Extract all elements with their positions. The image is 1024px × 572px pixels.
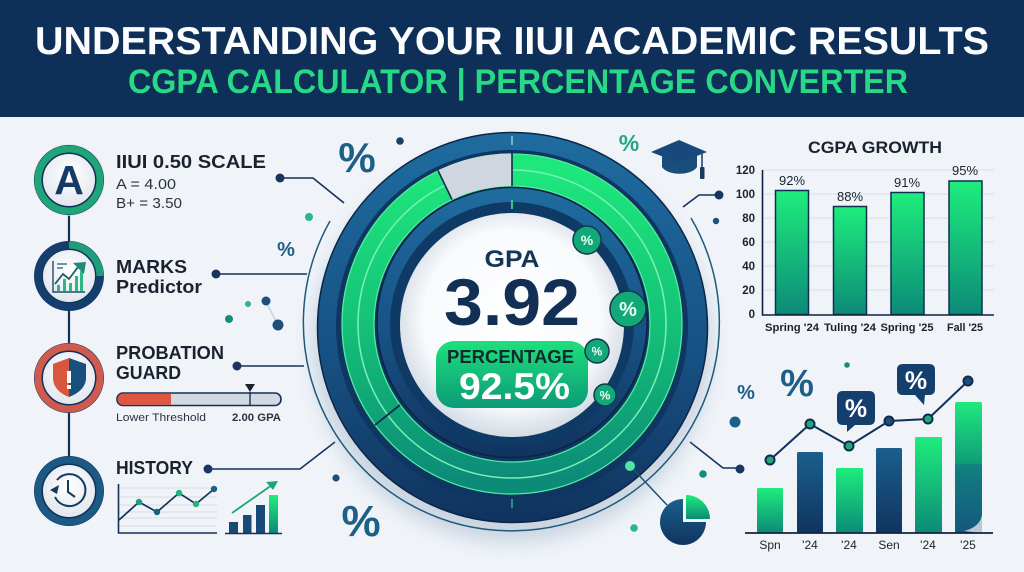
outer thin ring: [303, 218, 719, 531]
dial drop shadow: [312, 147, 712, 543]
chart: CGPA growth bars: [736, 138, 994, 334]
x axis labels: Spring '24: [765, 322, 820, 334]
mini growth bars with arrow: [225, 481, 282, 534]
y axis labels: 60: [742, 237, 755, 249]
value labels: 88%: [837, 189, 863, 204]
outer blue ring: [318, 132, 708, 522]
trend points: [766, 376, 972, 464]
text: A grade: A = 4.00: [116, 177, 176, 193]
value labels: 95%: [952, 163, 978, 178]
percent badges: %: [581, 232, 594, 248]
text: 2.00 GPA: 2.00 GPA: [232, 412, 281, 424]
callout: percent bubble right: [897, 364, 935, 405]
icon: grade A badge: [33, 144, 105, 216]
callout: percent bubble right: %: [905, 367, 927, 395]
center disc: [400, 213, 624, 437]
percent badges: %: [600, 388, 611, 402]
text: guard heading: GUARD: [116, 363, 181, 383]
probation threshold bar: [117, 384, 281, 406]
percent badges: %: [592, 344, 603, 358]
decorative percent signs and dots: %: [338, 134, 376, 181]
chart: trend bars with line: [745, 364, 993, 552]
chart: central GPA dial: [303, 132, 719, 543]
bars: [776, 181, 982, 314]
trend x axis labels: '24: [841, 538, 857, 552]
trend bars: [757, 402, 982, 533]
connector lines: [208, 178, 740, 469]
percentage pill: PERCENTAGE: [447, 347, 574, 367]
decorative percent signs and dots: %: [737, 382, 755, 404]
trend x axis labels: '25: [960, 538, 976, 552]
trend x axis labels: Spn: [759, 538, 781, 552]
trend x axis labels: '24: [802, 538, 818, 552]
trend x axis labels: '24: [920, 538, 936, 552]
y axis labels: 80: [742, 213, 755, 225]
green score ring: [342, 153, 682, 494]
ring grey gap: [438, 154, 512, 200]
value labels: 91%: [894, 175, 920, 190]
y axis labels: 120: [736, 165, 755, 177]
percentage pill: [436, 341, 588, 408]
text: B+ grade: B+ = 3.50: [116, 196, 182, 212]
icon: graduation cap: [651, 140, 707, 179]
value labels: [779, 163, 978, 204]
title: UNDERSTANDING YOUR IIUI ACADEMIC RESULTS: [35, 20, 989, 63]
trend line: [770, 381, 968, 460]
percent badges: [573, 226, 646, 406]
text: GPA value: 3.92: [444, 265, 580, 339]
text: predictor label: Predictor: [116, 276, 202, 297]
trend x axis labels: Sen: [878, 538, 900, 552]
text: history heading: HISTORY: [116, 458, 193, 478]
y axis labels: 100: [736, 189, 755, 201]
connector end dots: [204, 174, 744, 474]
y axis labels: 0: [749, 309, 755, 321]
text: GPA label: GPA: [484, 246, 540, 273]
icon: grade A badge: A: [54, 157, 84, 203]
text: lower threshold: Lower Threshold: [116, 412, 206, 424]
header banner: [0, 0, 1024, 117]
icon: marks chart badge: [34, 241, 104, 311]
y axis labels: [736, 165, 755, 321]
icon: history clock badge: [34, 456, 104, 526]
x axis labels: Tuling '24: [824, 322, 877, 334]
inner blue ring: [377, 188, 647, 458]
panel: left feature list: [33, 144, 282, 534]
decorative percent signs and dots: %: [780, 363, 814, 405]
dial ticks: [511, 136, 513, 145]
callout: percent bubble left: %: [845, 395, 867, 423]
decorative percent signs and dots: %: [619, 130, 639, 156]
decorative percent signs and dots: %: [341, 497, 381, 546]
subtitle: CGPA CALCULATOR | PERCENTAGE CONVERTER: [128, 63, 908, 101]
vertical timeline connector: [68, 210, 70, 465]
text: marks label: MARKS: [116, 256, 187, 277]
callout: percent bubble left: [837, 391, 875, 432]
icon: probation shield badge: [34, 343, 104, 413]
decorative percent signs and dots: %: [277, 239, 295, 261]
trend x axis labels: [759, 538, 976, 552]
percent badges: %: [619, 299, 637, 321]
value labels: 92%: [779, 173, 805, 188]
decorative percent signs and dots: [225, 130, 850, 546]
icon: pie chart: [625, 461, 710, 545]
x axis labels: Fall '25: [947, 322, 983, 334]
chart title: CGPA GROWTH: [808, 138, 942, 157]
text: probation heading: PROBATION: [116, 343, 224, 363]
text: scale heading: IIUI 0.50 SCALE: [116, 152, 266, 172]
y axis labels: 20: [742, 285, 755, 297]
percentage pill: 92.5%: [459, 366, 570, 407]
y axis labels: 40: [742, 261, 755, 273]
x axis labels: [765, 322, 983, 334]
x axis labels: Spring '25: [880, 322, 934, 334]
mini line chart: [118, 484, 217, 533]
